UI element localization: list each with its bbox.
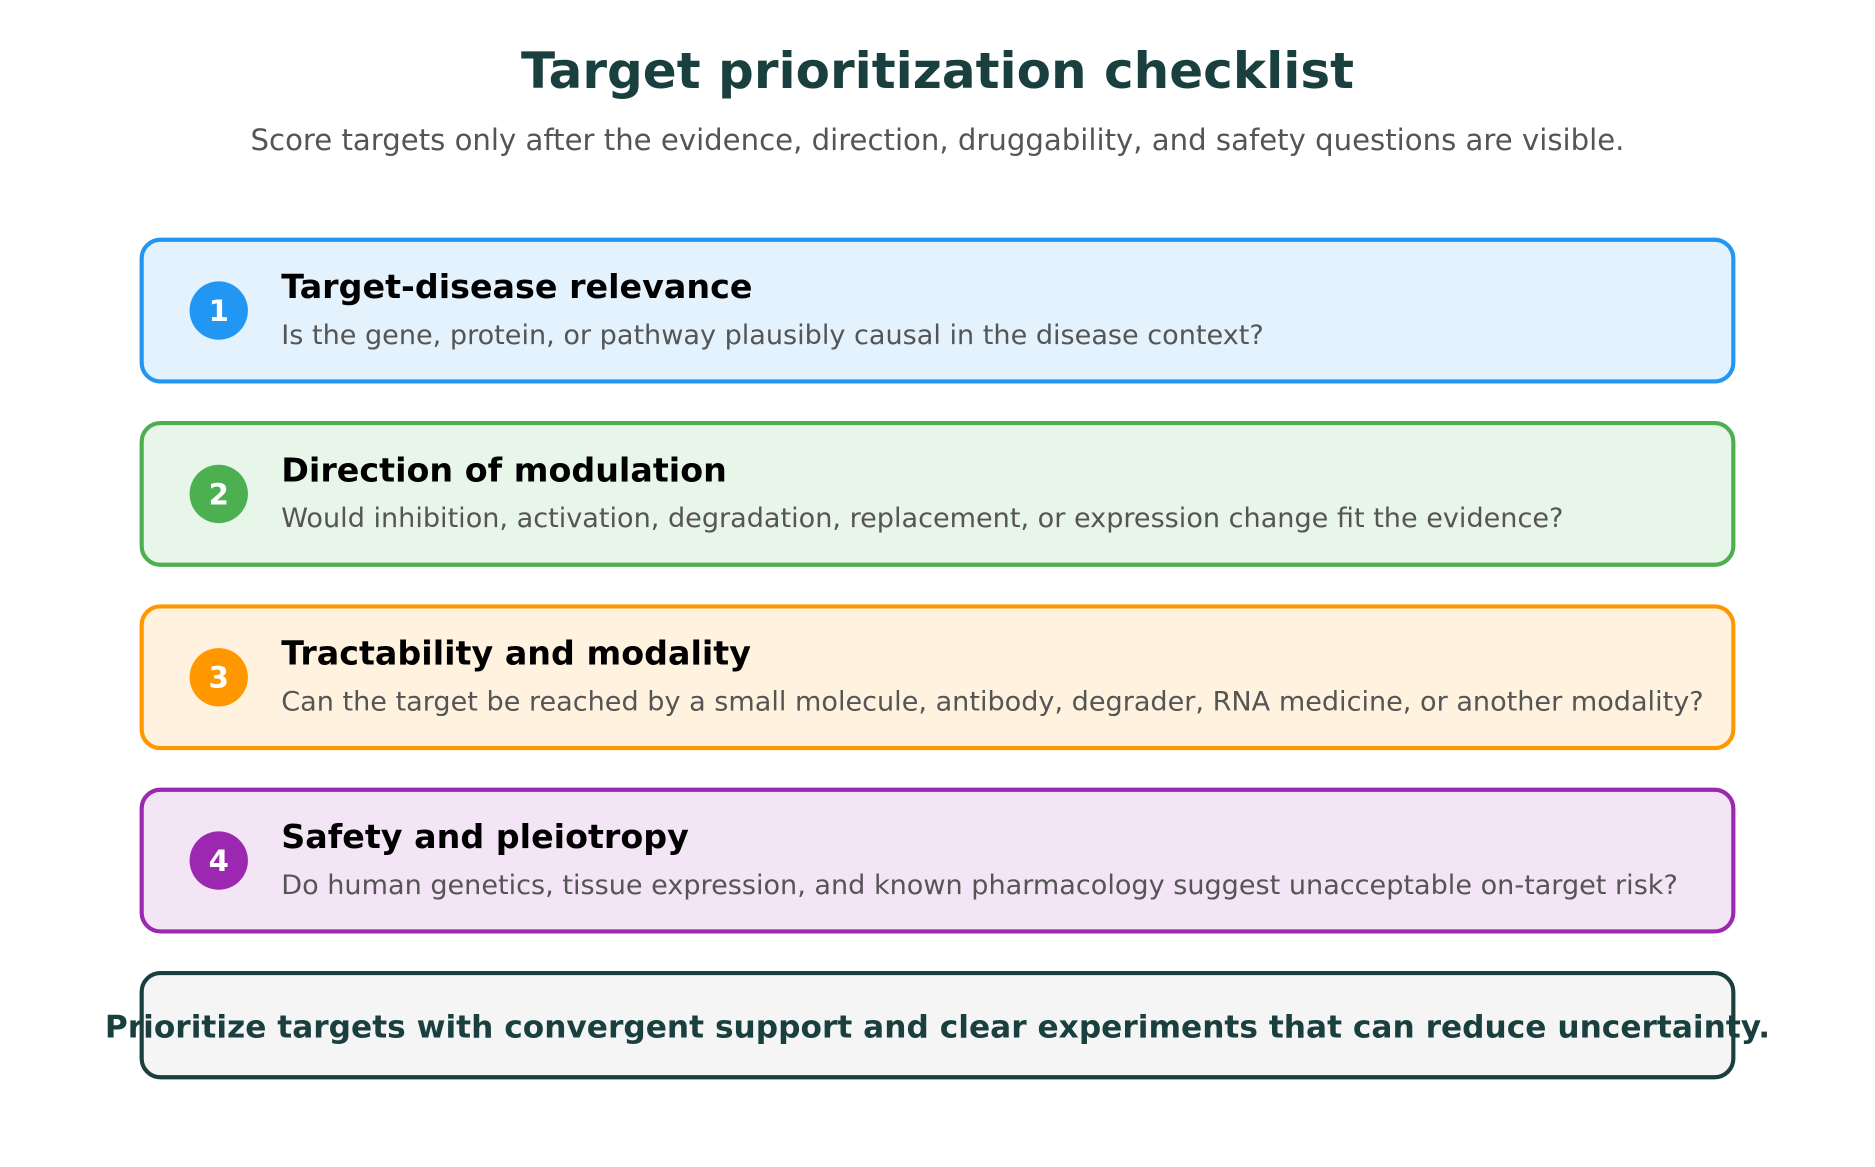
text: safety question: Do human genetics, tissue expression, and known pharmacology suggest unacceptable on-target risk? [281,870,1678,901]
callout text: Prioritize targets with convergent support and clear experiments that can reduce uncertainty. [105,1010,1770,1046]
heading: tractability and modality: Tractability and modality [281,634,751,673]
icon: number 1 [190,281,248,340]
panel: target-disease relevance [142,240,1733,381]
icon: number 2: 2 [209,477,229,511]
heading: safety and pleiotropy: Safety and pleiotropy [281,817,689,856]
icon: number 4: 4 [209,844,229,878]
icon: number 2 [190,465,248,523]
text: direction question: Would inhibition, activation, degradation, replacement, or expression change fit the evidence? [281,503,1563,534]
panel: safety and pleiotropy [142,790,1733,931]
icon: number 4 [190,831,248,890]
icon: number 3: 3 [209,661,229,695]
subtitle: Score targets only after the evidence, direction, druggability, and safety questions are visible. [251,123,1624,157]
panel: tractability and modality [142,606,1733,748]
text: tractability question: Can the target be reached by a small molecule, antibody, degrader, RNA medicine, or another modality? [281,687,1704,718]
heading: target-disease relevance: Target-disease relevance [281,267,752,306]
text: relevance question: Is the gene, protein, or pathway plausibly causal in the disease context? [281,320,1264,351]
icon: number 1: 1 [209,294,229,328]
panel: direction of modulation [142,423,1733,565]
title: Target prioritization checklist [521,42,1354,100]
icon: number 3 [190,648,248,706]
callout: conclusion [105,973,1770,1077]
heading: direction of modulation: Direction of modulation [281,450,727,489]
